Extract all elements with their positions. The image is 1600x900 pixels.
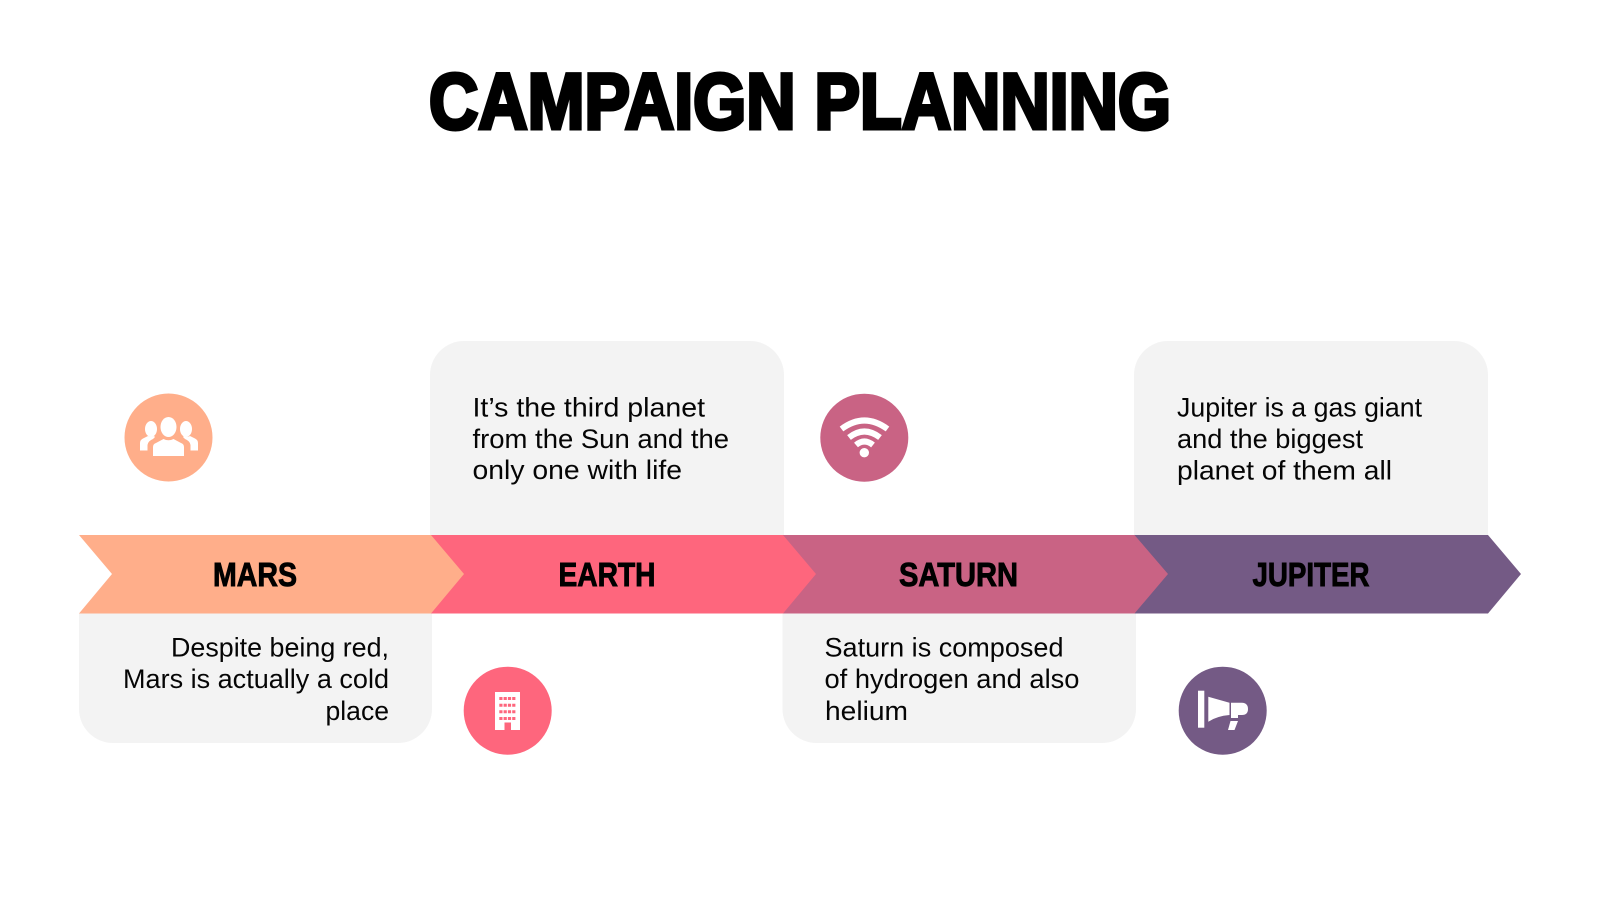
arrow: saturn: SATURN <box>899 556 1018 593</box>
panel: saturn description <box>782 613 1136 743</box>
arrow: jupiter <box>1134 535 1521 614</box>
panel: mars description <box>79 613 432 743</box>
arrow: saturn <box>783 535 1168 614</box>
panel: mars description: place <box>326 696 389 726</box>
title: CAMPAIGN PLANNING <box>429 56 1171 146</box>
panel: earth description: only one with life <box>472 455 682 485</box>
arrow: mars: MARS <box>213 556 297 593</box>
panel: earth description <box>430 341 784 535</box>
panel: earth description: It’s the third planet <box>472 392 706 422</box>
panel: saturn description: Saturn is composed <box>824 632 1064 662</box>
icon: people <box>124 394 212 482</box>
arrow: mars <box>79 535 464 614</box>
panel: jupiter description: Jupiter is a gas giant <box>1177 392 1423 422</box>
panel: jupiter description <box>1134 341 1488 535</box>
icon: wifi <box>820 394 908 482</box>
panel: jupiter description: and the biggest <box>1177 424 1364 454</box>
icon: building <box>464 667 552 755</box>
panel: saturn description: of hydrogen and also <box>824 664 1080 694</box>
panel: jupiter description: planet of them all <box>1177 456 1392 486</box>
arrow: jupiter: JUPITER <box>1252 556 1370 593</box>
panel: saturn description: helium <box>825 696 908 726</box>
panel: mars description: Mars is actually a cold <box>123 664 389 694</box>
icon: megaphone <box>1179 667 1267 755</box>
panel: mars description: Despite being red, <box>171 632 389 662</box>
arrow: earth <box>431 535 816 614</box>
panel: earth description: from the Sun and the <box>472 424 729 454</box>
arrow: earth: EARTH <box>558 556 656 593</box>
